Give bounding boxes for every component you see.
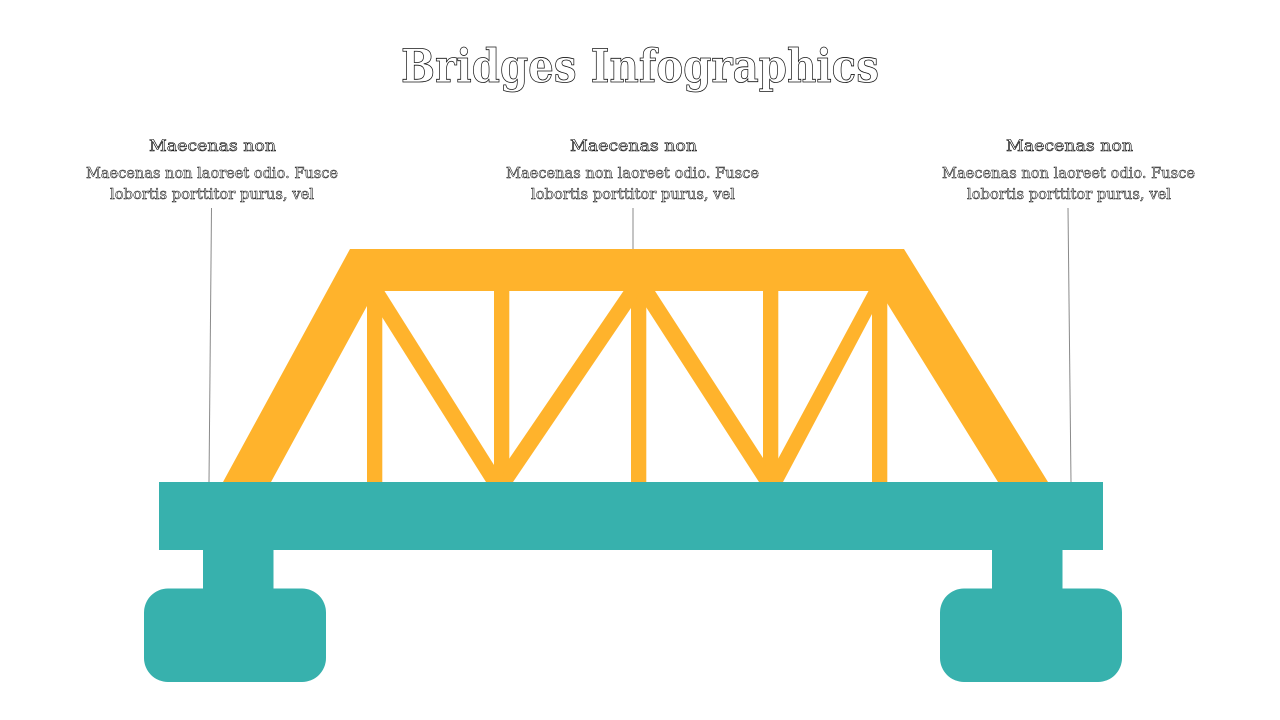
left footing <box>144 588 326 682</box>
leader line: left <box>209 208 212 482</box>
callout: center <box>506 136 759 203</box>
right footing <box>940 588 1122 682</box>
left callout text: lobortis porttitor purus, vel <box>110 185 314 203</box>
center callout text <box>506 164 759 203</box>
truss verticals <box>367 291 887 482</box>
leader line: right <box>1068 208 1071 482</box>
deck <box>159 482 1103 550</box>
truss diagonals <box>367 291 880 482</box>
right pier <box>992 550 1062 590</box>
right callout heading: Maecenas non <box>1006 136 1133 155</box>
bridge truss <box>223 249 1048 482</box>
leader line: center <box>632 208 634 249</box>
callout: right <box>942 136 1195 203</box>
right callout text: lobortis porttitor purus, vel <box>967 185 1171 203</box>
left callout heading: Maecenas non <box>149 136 276 155</box>
center callout heading: Maecenas non <box>570 136 697 155</box>
right callout text: Maecenas non laoreet odio. Fusce <box>942 164 1195 182</box>
center callout text: Maecenas non laoreet odio. Fusce <box>506 164 759 182</box>
title: Bridges Infographics <box>401 39 879 93</box>
callout: left <box>86 136 338 203</box>
left pier <box>203 550 274 590</box>
center callout text: lobortis porttitor purus, vel <box>531 185 735 203</box>
left callout text: Maecenas non laoreet odio. Fusce <box>86 164 338 182</box>
bridge deck and piers <box>144 482 1122 682</box>
left callout text <box>86 164 338 203</box>
right callout text <box>942 164 1195 203</box>
top chord and end legs <box>223 249 1048 482</box>
